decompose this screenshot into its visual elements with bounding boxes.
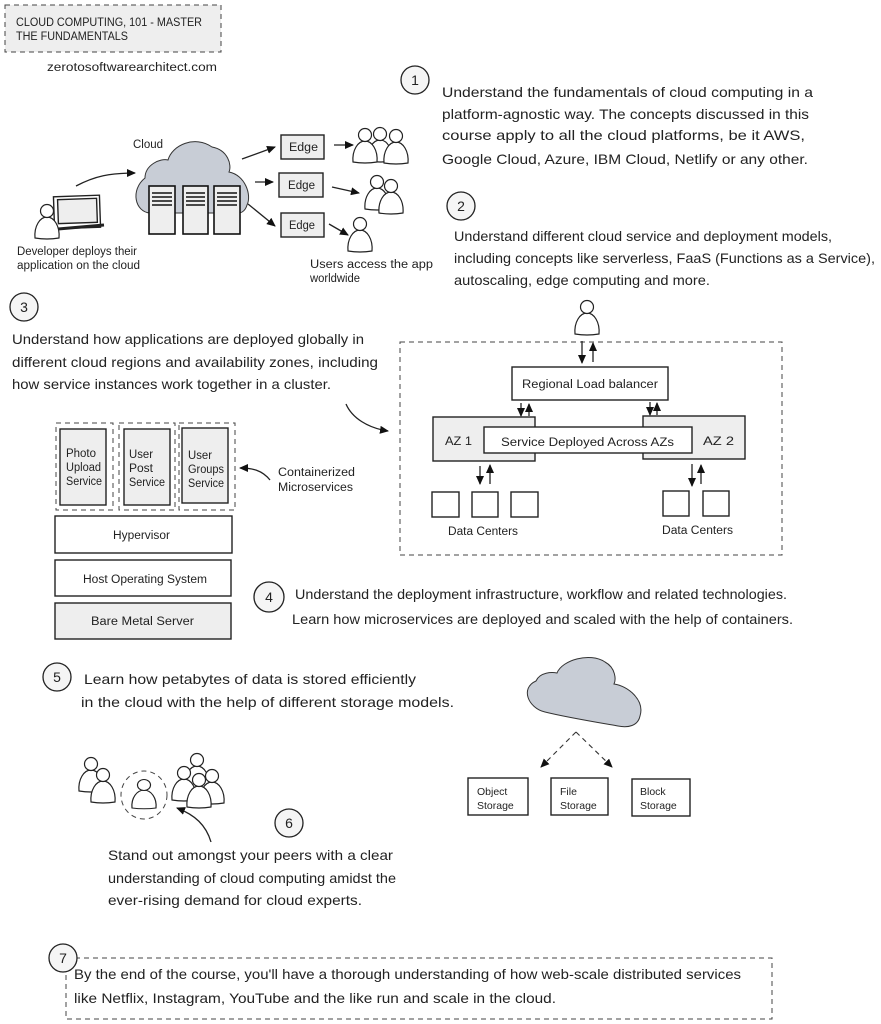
availability zone 1 [433, 417, 535, 461]
edge node 3: Edge [289, 220, 315, 232]
step 4 text: Learn how microservices are deployed and scaled with the help of containers. [292, 611, 793, 627]
arrow: containerized label [240, 468, 270, 480]
container: user post: User [129, 449, 153, 461]
arrows: cloud to edges [242, 147, 275, 226]
icon: two peers [79, 758, 115, 803]
conclusion box [49, 944, 772, 1019]
data center boxes AZ 2 [663, 491, 729, 516]
edge node 1 [281, 135, 324, 159]
edge node 1: Edge [289, 142, 318, 154]
step 4 number [254, 582, 284, 612]
availability zone 2: AZ 2 [703, 436, 734, 448]
arrows: AZs to data centers [480, 464, 701, 486]
icon: highlighted person [121, 771, 167, 819]
step 4 text: Understand the deployment infrastructure, workflow and related technologies. [295, 586, 787, 602]
file storage: File [560, 786, 577, 798]
storage diagram [468, 658, 690, 816]
step 1 text: Understand the fundamentals of cloud computing in a [442, 84, 813, 100]
container: user post [119, 423, 175, 510]
host operating system layer: Host Operating System [83, 574, 207, 586]
caption: developer: Developer deploys their [17, 246, 137, 258]
block storage: Storage [640, 800, 677, 812]
arrows: load balancer to AZs [521, 402, 657, 416]
conclusion text: By the end of the course, you'll have a thorough understanding of how web-scale distributed services [74, 966, 741, 982]
step 3 number: 3 [20, 299, 28, 315]
label: cloud: Cloud [133, 139, 163, 151]
conclusion text [74, 966, 741, 1006]
step 1 text: platform-agnostic way. The concepts discussed in this [442, 106, 809, 122]
object storage: Storage [477, 800, 514, 812]
step 2 text: Understand different cloud service and deployment models, [454, 228, 832, 244]
label: containerized microservices [278, 467, 355, 494]
availability zone 2 [643, 416, 745, 459]
website url: zerotosoftwarearchitect.com [47, 62, 217, 74]
title box: THE FUNDAMENTALS [16, 31, 128, 43]
title box: CLOUD COMPUTING, 101 - MASTER [16, 17, 202, 29]
container: photo upload [56, 423, 113, 510]
arrow: developer to cloud [76, 173, 135, 186]
icon: users group 2 [365, 176, 403, 214]
step 5 text: in the cloud with the help of different storage models. [81, 694, 454, 710]
step 4 number: 4 [265, 589, 273, 605]
label: data centers AZ 2: Data Centers [662, 525, 733, 537]
host operating system layer [55, 560, 231, 596]
arrow: step 3 to region diagram [346, 404, 388, 431]
label: containerized microservices: Containerized [278, 467, 355, 479]
service across AZs [484, 427, 692, 453]
icon: cloud with servers [136, 142, 249, 234]
container: photo upload: Service [66, 476, 102, 488]
step 1 number: 1 [411, 72, 419, 88]
caption: users: Users access the app [310, 259, 433, 271]
step 4 text [292, 586, 793, 627]
container: photo upload: Upload [66, 462, 101, 474]
block storage: Block [640, 786, 666, 798]
caption: users: worldwide [309, 273, 360, 285]
hypervisor layer [55, 516, 232, 553]
bare metal server layer [55, 603, 231, 639]
availability zone 1: AZ 1 [445, 436, 472, 448]
step 1 number [401, 66, 429, 94]
service across AZs: Service Deployed Across AZs [501, 437, 674, 449]
step 3 number [10, 293, 38, 321]
peers illustration [79, 754, 224, 819]
step 3 text: different cloud regions and availability zones, including [12, 354, 378, 370]
regional deployment diagram [400, 300, 782, 555]
arrow: to highlighted person [177, 808, 211, 842]
step 7 number: 7 [59, 950, 67, 966]
deployment diagram [17, 128, 433, 285]
object storage: Object [477, 786, 507, 798]
step 6 text: understanding of cloud computing amidst the [108, 870, 396, 886]
icon: developer with laptop [35, 195, 104, 239]
icon: peer group [172, 754, 224, 808]
step 2 text: autoscaling, edge computing and more. [454, 272, 710, 288]
dashed arrows to storage types [541, 732, 612, 767]
load balancer [512, 367, 668, 400]
step 2 text [454, 228, 875, 288]
step 2 number [447, 192, 475, 220]
step 5 text [81, 671, 454, 710]
infrastructure stack [55, 423, 235, 639]
container: user groups: Service [188, 478, 224, 490]
container: user groups [179, 423, 235, 510]
conclusion text: like Netflix, Instagram, YouTube and the like run and scale in the cloud. [74, 990, 556, 1006]
hypervisor layer: Hypervisor [113, 530, 170, 542]
container: user groups: User [188, 450, 212, 462]
container: photo upload: Photo [66, 448, 96, 460]
caption: developer: application on the cloud [17, 260, 140, 272]
step 2 number: 2 [457, 198, 465, 214]
step 6 text: Stand out amongst your peers with a clear [108, 847, 393, 863]
edge node 3 [281, 213, 324, 237]
edge node 2: Edge [288, 180, 315, 192]
arrows: user to load balancer [582, 341, 593, 363]
region boundary [400, 342, 782, 555]
step 5 number [43, 663, 71, 691]
step 5 number: 5 [53, 669, 61, 685]
icon: user [575, 300, 599, 335]
bare metal server layer: Bare Metal Server [91, 616, 194, 628]
container: user post: Service [129, 477, 165, 489]
container: user post: Post [129, 463, 154, 475]
step 3 text [12, 331, 378, 392]
step 6 text [108, 847, 396, 908]
load balancer: Regional Load balancer [522, 379, 658, 391]
step 6 number: 6 [285, 815, 293, 831]
label: containerized microservices: Microservices [278, 482, 353, 494]
step 3 text: Understand how applications are deployed globally in [12, 331, 364, 347]
file storage: Storage [560, 800, 597, 812]
caption: users [309, 259, 433, 285]
icon: users group 1 [353, 128, 408, 164]
data center boxes AZ 1 [432, 492, 538, 517]
icon: single user [348, 218, 372, 252]
step 2 text: including concepts like serverless, FaaS (Functions as a Service), [454, 250, 875, 266]
caption: developer [17, 246, 140, 272]
step 1 text: Google Cloud, Azure, IBM Cloud, Netlify or any other. [442, 151, 808, 167]
container: user groups: Groups [188, 464, 224, 476]
step 7 number [49, 944, 77, 972]
step 6 number [275, 809, 303, 837]
step 3 text: how service instances work together in a cluster. [12, 376, 331, 392]
block storage [632, 779, 690, 816]
title box [5, 5, 221, 52]
step 5 text: Learn how petabytes of data is stored efficiently [84, 671, 416, 687]
arrows: edges to users [329, 145, 359, 235]
object storage [468, 778, 528, 815]
step 1 text: course apply to all the cloud platforms, be it AWS, [442, 127, 805, 143]
label: data centers AZ 1: Data Centers [448, 526, 518, 538]
edge node 2 [279, 173, 323, 197]
step 1 text [442, 84, 813, 167]
icon: storage cloud [527, 658, 641, 727]
file storage [551, 778, 608, 815]
step 6 text: ever-rising demand for cloud experts. [108, 892, 362, 908]
